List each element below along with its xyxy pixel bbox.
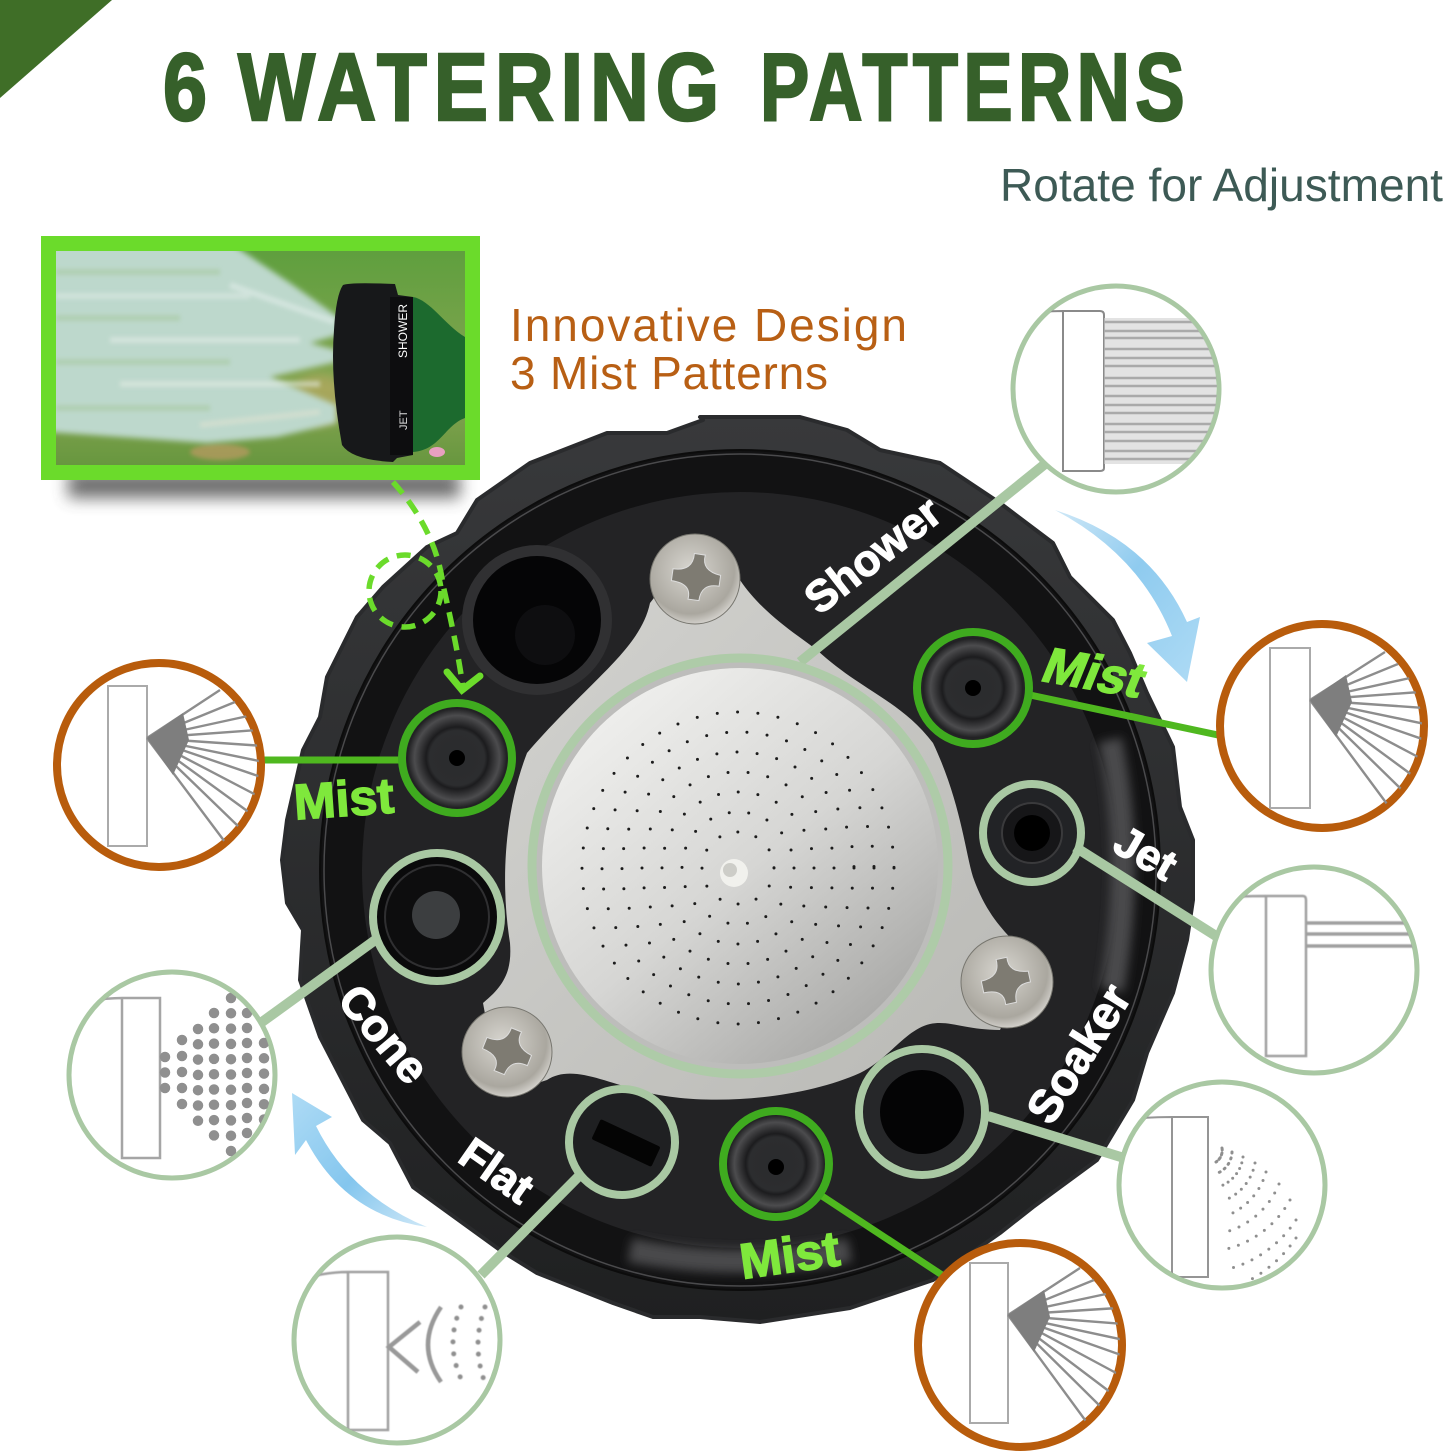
rotation arrow: counterclockwise [292,1093,427,1227]
callout: flat pattern [290,1237,500,1443]
title: PATTERNS [760,34,1190,141]
callout: soaker pattern [1115,1082,1325,1288]
port ring: cone [373,853,501,981]
shower dome with holes [535,661,945,1071]
screw: top [650,534,740,624]
label: mist bottom: Mist [736,1220,843,1290]
corner triangle [0,0,112,98]
callout: shower pattern [1010,286,1220,492]
port ring: mist bottom [723,1111,829,1217]
port: cone [377,857,497,977]
port: flat [572,1092,672,1192]
title: WATERING [238,34,726,141]
callout: cone pattern [69,972,275,1178]
label: cone: Cone [328,975,440,1094]
photo panel: spraying nozzle: SHOWER [396,304,410,358]
title [163,34,1190,141]
port: soaker [864,1054,980,1170]
rubber outer rim [282,417,1193,1322]
ring: shower dome [532,658,948,1074]
large open port [462,545,612,695]
nozzle head [282,417,1193,1322]
callout text: innovative design [510,299,907,399]
callout: mist pattern bottom [918,1243,1124,1447]
callout text: innovative design: Innovative Design [510,299,907,351]
callout text: innovative design: 3 Mist Patterns [510,347,828,399]
screw: left [462,1007,552,1097]
subtitle: Rotate for Adjustment [1000,159,1443,211]
port: jet [988,789,1076,877]
port ring: jet [983,784,1081,882]
callout: mist pattern left [57,663,264,867]
callout: mist pattern right [1220,624,1425,828]
silver plate [483,545,1030,1100]
screw: right [961,936,1053,1028]
label: mist left: Mist [292,768,396,830]
title: 6 [163,34,207,141]
port: mist left [407,708,507,808]
photo panel: spraying nozzle: JET [398,410,410,430]
label: jet: Jet [1105,816,1185,891]
inner face [320,450,1160,1290]
dashed pointer from photo to mist port [369,482,480,690]
photo panel: spraying nozzle [41,236,480,498]
label: soaker: Soaker [1016,975,1141,1132]
worn bands on the face [630,740,1123,1261]
label: flat: Flat [450,1129,543,1214]
port ring: flat [569,1089,675,1195]
port: mist bottom [727,1115,825,1213]
connector lines: pale green [262,464,1216,1275]
port: mist upper right [923,638,1023,738]
connector lines: mist green [264,695,1218,1275]
port ring: soaker [859,1049,985,1175]
label: shower: Shower [795,487,951,624]
port ring: mist left [402,703,512,813]
port ring: mist upper right [917,632,1029,744]
rotation arrow: clockwise [1055,510,1200,682]
callout: jet pattern [1210,867,1420,1073]
label: mist upper right: Mist [1035,637,1155,708]
